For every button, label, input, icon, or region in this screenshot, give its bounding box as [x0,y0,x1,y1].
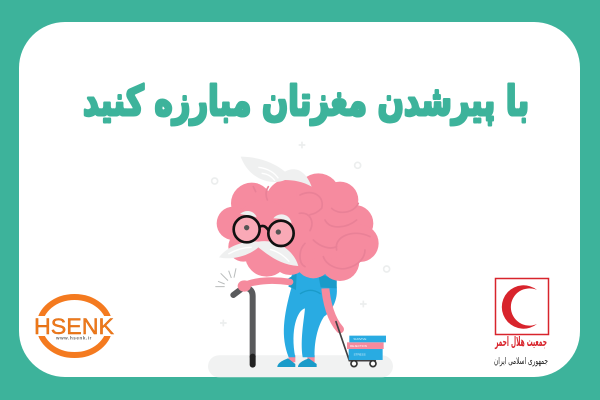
shoes [277,358,295,367]
logo square [496,278,548,334]
logo country: جمهوری اسلامی ایران [494,356,548,367]
hand [238,280,251,292]
book: survive [349,336,386,342]
far arm to cart [325,283,340,329]
brain folds [253,187,370,269]
brain head [217,173,379,281]
cart with books [336,322,386,367]
moustache [219,241,298,266]
glasses [234,216,294,246]
cart with books: STRESS [354,353,366,357]
logo ring [40,297,110,355]
background sparkles [212,142,390,326]
trousers [284,287,337,357]
book: stress [349,349,383,360]
crescent [502,285,537,329]
hair tuft [241,157,312,187]
logo band [32,316,118,336]
eyebrows [240,211,257,217]
logo url: www.hsenk.ir [55,336,92,340]
cart with books: SURVIVE [353,337,366,341]
logo: HSENK [32,297,118,355]
book: rejection [347,342,384,349]
cart with books: REJECTION [350,344,367,348]
socks [289,355,315,362]
illustration: old brain character [208,142,393,377]
cane [233,288,253,365]
tap lines [215,268,236,287]
near arm [243,281,290,286]
logo: Red Crescent [494,278,548,367]
t-shirt [288,270,337,290]
logo wordmark: HSENK [34,314,114,339]
legs and body [277,270,340,367]
ground shadow [208,355,393,377]
